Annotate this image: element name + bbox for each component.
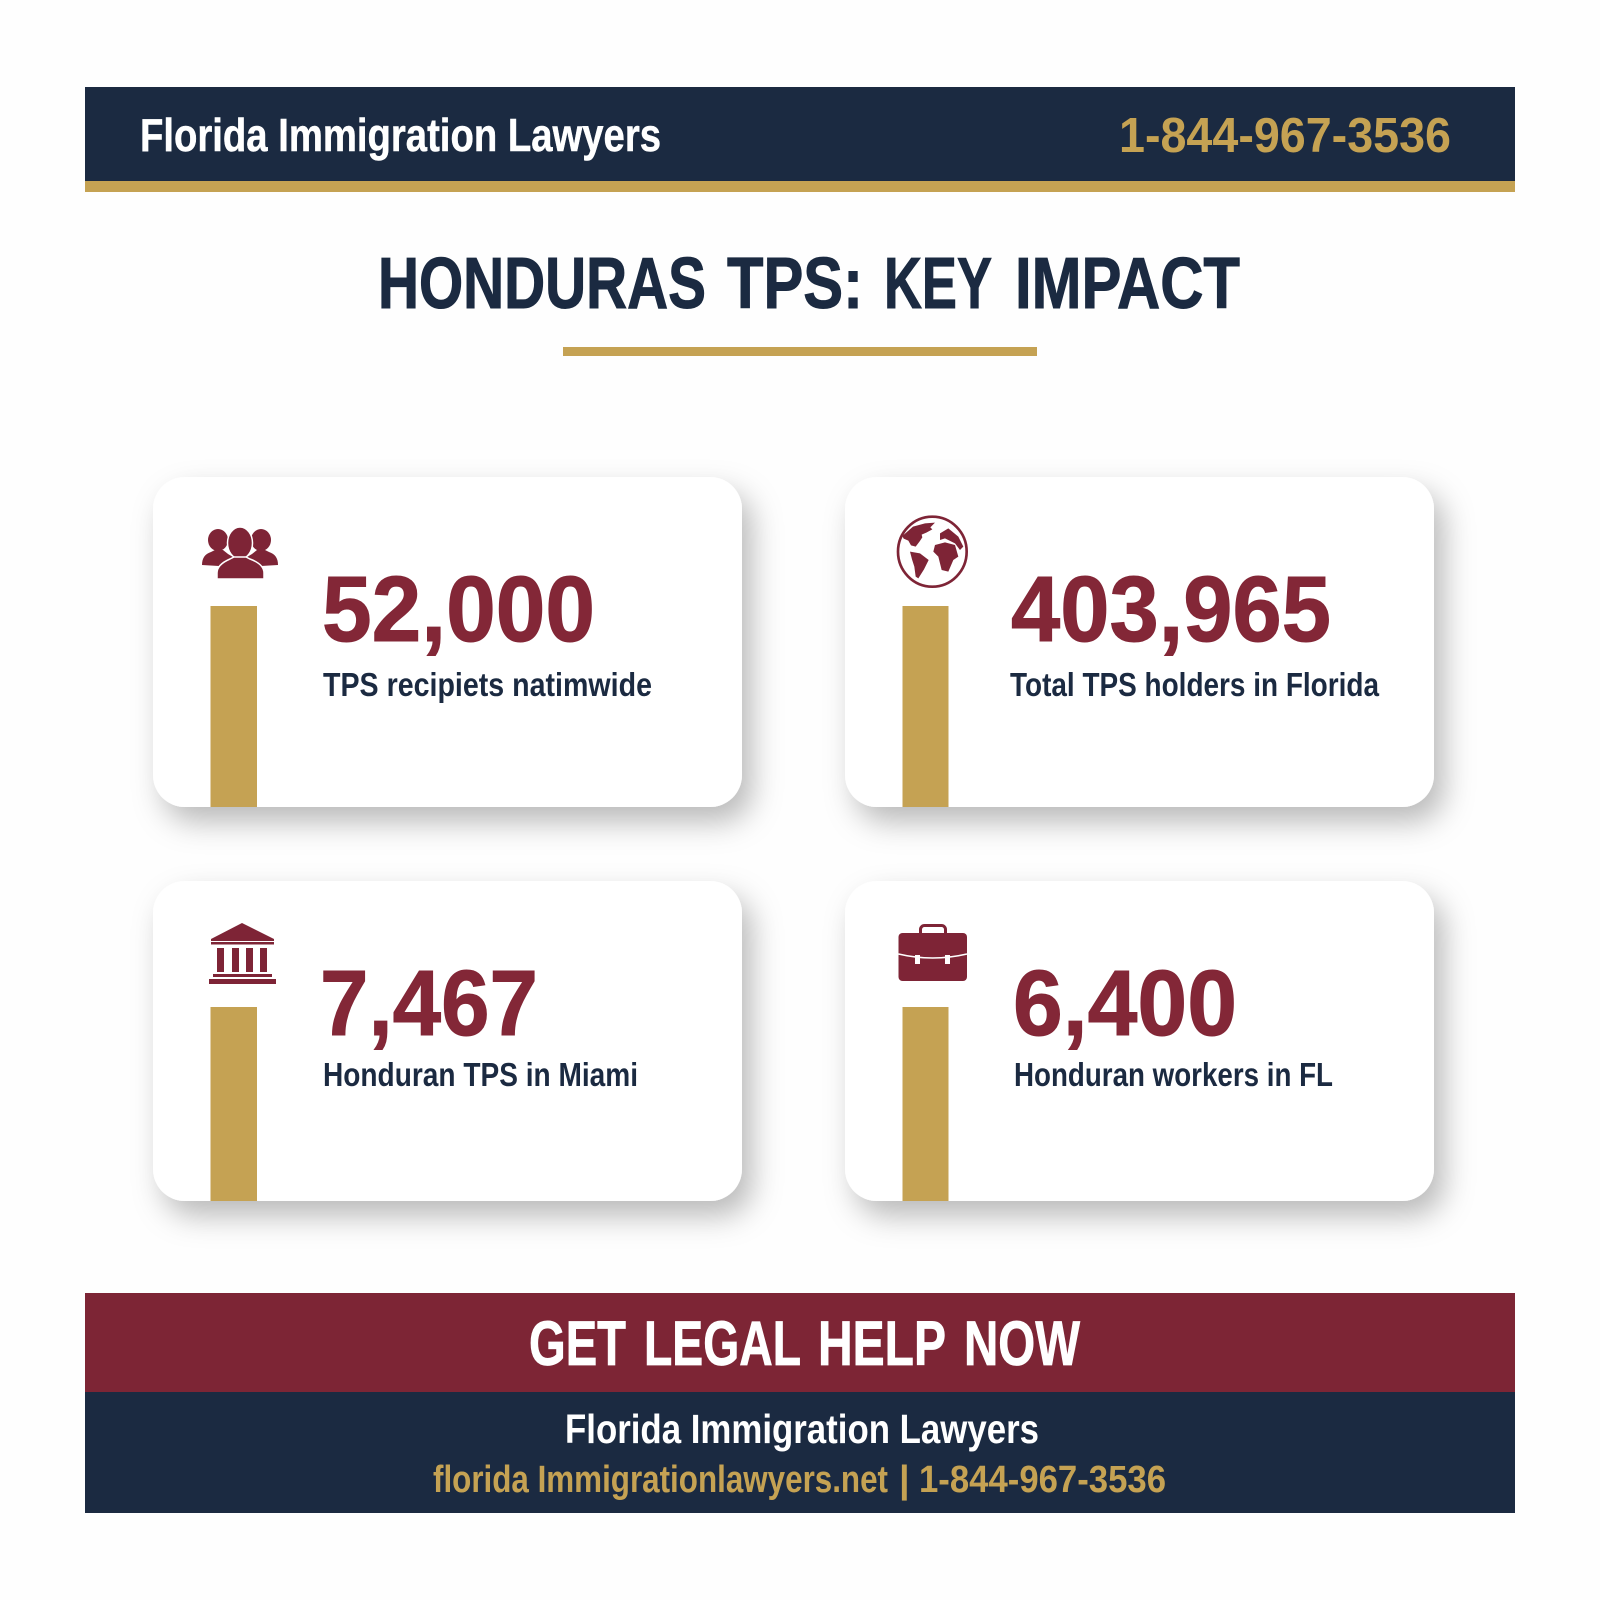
icon: people (202, 527, 278, 579)
call to action text: HELP (818, 1309, 946, 1379)
title: KEY (884, 244, 992, 324)
call to action text (529, 1309, 1080, 1379)
statistic: 403,965 (1011, 557, 1331, 661)
statistic: 52,000 (322, 557, 595, 661)
title (378, 244, 1240, 324)
caption: TPS recipiets natimwide (323, 666, 652, 703)
panel: Honduran workers in FL (845, 881, 1434, 1201)
call to action text: GET (529, 1309, 626, 1379)
footer website and phone: 1-844-967-3536 (919, 1459, 1166, 1501)
statistic: 6,400 (1013, 951, 1237, 1055)
header firm name: Florida Immigration Lawyers (140, 109, 661, 161)
panel: total TPS holders in Florida (845, 477, 1434, 807)
icon: globe (898, 517, 967, 587)
call to action text: LEGAL (644, 1309, 801, 1379)
caption: Total TPS holders in Florida (1010, 666, 1380, 703)
caption: Honduran TPS in Miami (323, 1056, 638, 1093)
footer website and phone: florida Immigrationlawyers.net (433, 1459, 888, 1501)
call to action text: NOW (964, 1309, 1080, 1379)
caption: Honduran workers in FL (1014, 1056, 1333, 1093)
panel: TPS recipients nationwide (153, 477, 742, 807)
footer firm name: Florida Immigration Lawyers (565, 1406, 1039, 1452)
icon: briefcase (898, 926, 967, 981)
title: TPS: (727, 244, 863, 324)
header bar (85, 87, 1515, 192)
title: IMPACT (1015, 244, 1240, 324)
icon: courthouse (209, 923, 276, 984)
call to action banner (85, 1293, 1515, 1392)
title underline (563, 347, 1037, 356)
header phone number: 1-844-967-3536 (1119, 109, 1451, 163)
footer website and phone: | (899, 1459, 910, 1501)
statistic: 7,467 (320, 951, 538, 1055)
title: HONDURAS (378, 244, 706, 324)
footer contact panel (85, 1392, 1515, 1513)
panel: Honduran TPS in Miami (153, 881, 742, 1201)
